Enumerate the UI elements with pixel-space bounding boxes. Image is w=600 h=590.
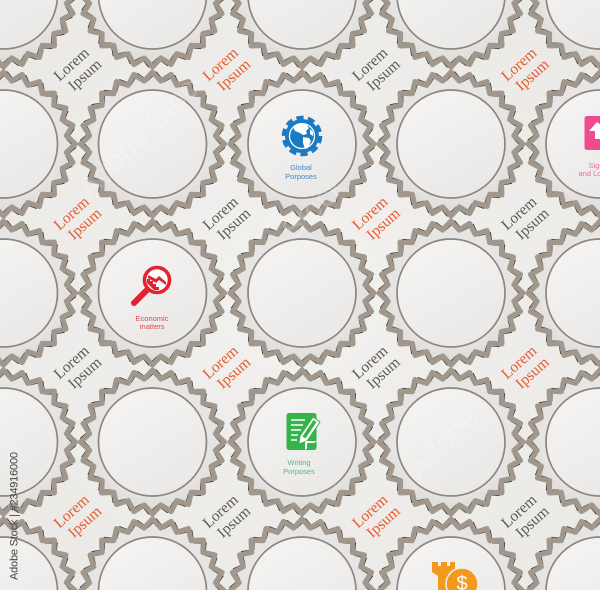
label row 1: Lorem bbox=[51, 44, 93, 85]
label row 3: Ipsum bbox=[65, 354, 105, 392]
label row 4: Lorem bbox=[200, 491, 242, 532]
label row 2: Ipsum bbox=[214, 205, 254, 243]
label row 2: Lorem bbox=[200, 193, 242, 234]
label row 2: Lorem bbox=[51, 193, 93, 234]
label row 4: Ipsum bbox=[214, 503, 254, 541]
text: Writing Porposes: Writing bbox=[287, 458, 311, 467]
label row 2: Lorem bbox=[349, 193, 391, 234]
watermark: Stock bbox=[275, 169, 352, 246]
label row 3: Ipsum bbox=[214, 354, 254, 392]
label row 3: Ipsum bbox=[512, 354, 553, 392]
badge row 2 bbox=[0, 68, 600, 220]
label row 1: Lorem bbox=[349, 44, 391, 85]
watermark: Adobe Stock bbox=[71, 61, 216, 205]
label row 1: Lorem bbox=[200, 44, 242, 85]
label row 4: Ipsum bbox=[512, 503, 553, 541]
label row 2: Lorem bbox=[498, 193, 540, 234]
icon: orange tower and coin bbox=[432, 562, 478, 590]
lorem ipsum labels bbox=[51, 43, 553, 544]
text: Global Porposes: Global bbox=[290, 163, 312, 172]
label row 3: Lorem bbox=[51, 342, 93, 383]
text: Economic matters bbox=[136, 314, 169, 331]
label row 2: Ipsum bbox=[363, 205, 404, 243]
watermark bbox=[71, 61, 486, 486]
label row 1: Ipsum bbox=[512, 56, 553, 94]
label row 1: Ipsum bbox=[363, 56, 404, 94]
text: Economic matters: Economic bbox=[136, 314, 169, 323]
badge row 3 bbox=[0, 217, 600, 369]
text: Economic matters: matters bbox=[139, 322, 165, 331]
badge row 1 bbox=[0, 0, 600, 71]
label row 1 bbox=[51, 43, 553, 97]
label row 4: Ipsum bbox=[363, 503, 404, 541]
watermark: Adobe bbox=[401, 401, 486, 486]
label row 1: Ipsum bbox=[65, 56, 105, 94]
label row 4: Ipsum bbox=[65, 503, 105, 541]
label row 3: Lorem bbox=[349, 342, 391, 383]
icon: global purposes globe gear bbox=[284, 118, 320, 154]
label row 1: Lorem bbox=[498, 44, 540, 85]
label row 2: Ipsum bbox=[512, 205, 553, 243]
badge row 4 bbox=[0, 366, 600, 518]
label row 3: Ipsum bbox=[363, 354, 404, 392]
label row 3: Lorem bbox=[200, 342, 242, 383]
text: Writing Porposes bbox=[283, 458, 315, 476]
label row 3 bbox=[51, 341, 553, 395]
text: Global Porposes: Porposes bbox=[285, 172, 317, 181]
text: Sign and Logos bbox=[578, 161, 600, 178]
text: Writing Porposes: Porposes bbox=[283, 467, 315, 476]
text: Global Porposes bbox=[285, 163, 317, 181]
label row 4: Lorem bbox=[498, 491, 540, 532]
label row 4: Lorem bbox=[51, 491, 93, 532]
label row 3: Lorem bbox=[498, 342, 540, 383]
label row 2: Ipsum bbox=[65, 205, 105, 243]
label row 4 bbox=[51, 490, 553, 544]
label row 2 bbox=[51, 192, 553, 246]
icon: pink sign tile bbox=[584, 116, 600, 150]
label row 1: Ipsum bbox=[214, 56, 254, 94]
label row 4: Lorem bbox=[349, 491, 391, 532]
icon: writing purposes document bbox=[286, 413, 320, 450]
watermark: stock id: Adobe Stock | #234916000 bbox=[8, 452, 20, 580]
icon: economic matters magnifier bbox=[134, 268, 170, 303]
badge row 5 bbox=[0, 515, 600, 590]
